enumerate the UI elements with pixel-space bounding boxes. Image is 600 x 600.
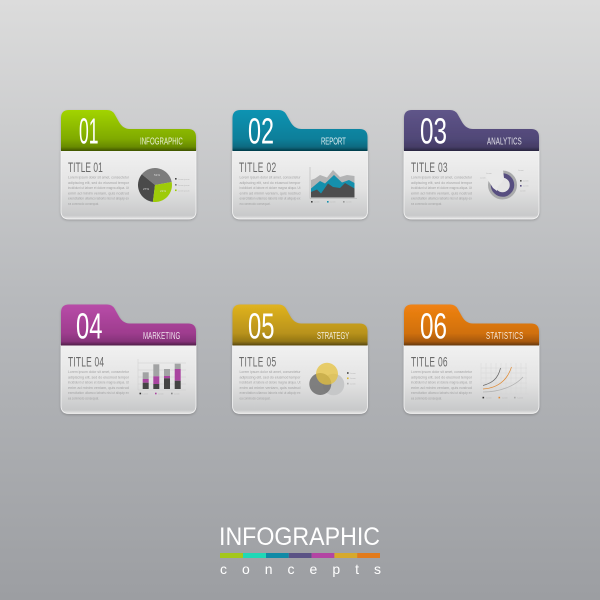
body text: enim ad minim veniam, quis nostrud [411, 190, 472, 195]
number 03: 03 [420, 110, 447, 152]
tab label: INFOGRAPHIC [140, 136, 183, 147]
body text: ea commodo consequat. [411, 201, 442, 206]
area chart: Lorem [330, 202, 336, 204]
pie chart: 21% [160, 189, 166, 193]
body text: ea commodo consequat. [411, 396, 442, 400]
card 01: infographic: 01 [79, 110, 98, 152]
body text: ea commodo consequat. [240, 396, 270, 400]
line chart: Lorem [486, 397, 492, 399]
title: TITLE 03 [411, 161, 448, 176]
line chart [481, 363, 529, 399]
body text: incididunt ut labore et dolore magna aliqua. Ut [240, 185, 301, 190]
pie chart: 27% [143, 187, 149, 191]
body text: exercitation ullamco laboris nisi ut aliquip ex [240, 196, 300, 201]
body text: incididunt ut labore et dolore magna aliqua. Ut [68, 380, 130, 385]
donut chart: Lorem [523, 181, 529, 183]
body text: Lorem ipsum dolor sit amet, consectetur [411, 174, 473, 180]
body text: Lorem ipsum dolor sit amet, consectetur [240, 369, 301, 374]
donut chart: Lorem [486, 173, 492, 175]
tab label: REPORT [321, 136, 346, 147]
body text: exercitation ullamco laboris nisi ut aliquip ex [68, 390, 129, 395]
title: TITLE 01 [68, 161, 103, 176]
body text: Lorem ipsum dolor sit amet, consectetur [411, 369, 473, 374]
tab label: ANALYTICS [487, 136, 522, 147]
area chart: Lorem [314, 202, 320, 204]
number 02: 02 [248, 110, 274, 152]
body text: exercitation ullamco laboris nisi ut aliquip ex [411, 196, 472, 201]
stacked bar chart: Lorem [142, 393, 149, 395]
title: TITLE 04 [68, 356, 104, 370]
body text: exercitation ullamco laboris nisi ut aliquip ex [411, 390, 472, 395]
body text [240, 174, 301, 206]
card 06: statistics [404, 304, 539, 414]
body text [411, 174, 473, 206]
pie chart: Lorem ipsum [178, 179, 190, 181]
stacked bar chart [138, 359, 186, 395]
card 05: strategy [232, 304, 368, 414]
venn diagram: Lorem [350, 373, 356, 375]
body text: incididunt ut labore et dolore magna aliqua. Ut [411, 185, 473, 190]
card 04: marketing [61, 304, 196, 414]
number 04: 04 [76, 306, 102, 346]
body text: incididunt ut labore et dolore magna aliqua. Ut [411, 380, 473, 385]
area chart: Lorem [346, 202, 352, 204]
body text: enim ad minim veniam, quis nostrud [240, 385, 300, 390]
donut chart: Lorem [480, 178, 486, 180]
body text: ea commodo consequat. [68, 201, 99, 206]
body text: enim ad minim veniam, quis nostrud [411, 385, 472, 390]
body text: incididunt ut labore et dolore magna aliqua. Ut [240, 380, 301, 385]
body text: exercitation ullamco laboris nisi ut aliquip ex [240, 390, 300, 395]
donut chart: Lorem [520, 191, 526, 193]
pie chart: 51% [154, 173, 160, 177]
body text: enim ad minim veniam, quis nostrud [68, 190, 129, 195]
body text: enim ad minim veniam, quis nostrud [240, 190, 300, 195]
donut chart: Lorem [523, 186, 529, 188]
body text [411, 369, 473, 400]
card 02: report [232, 110, 368, 219]
card 03: analytics [404, 110, 539, 219]
number 06: 06 [420, 306, 447, 346]
body text: ea commodo consequat. [240, 201, 270, 206]
body text: adipiscing elit, sed do eiusmod tempor [68, 180, 130, 185]
tab label: STATISTICS [486, 331, 524, 341]
body text: Lorem ipsum dolor sit amet, consectetur [68, 174, 130, 180]
tab label: MARKETING [143, 331, 180, 341]
body text: Lorem ipsum dolor sit amet, consectetur [240, 174, 301, 180]
body text: exercitation ullamco laboris nisi ut aliquip ex [68, 196, 129, 201]
colour strip [220, 553, 380, 558]
body text [68, 174, 130, 206]
body text: adipiscing elit, sed do eiusmod tempor [411, 374, 473, 379]
title: TITLE 05 [239, 356, 276, 370]
venn diagram: Lorem [350, 383, 356, 385]
body text: adipiscing elit, sed do eiusmod tempor [240, 374, 301, 379]
venn diagram: Lorem [350, 378, 356, 380]
tab label: STRATEGY [317, 331, 350, 341]
body text [240, 369, 301, 400]
card 01: infographic [61, 110, 196, 219]
footer heading: INFOGRAPHIC [219, 523, 380, 551]
body text: enim ad minim veniam, quis nostrud [68, 385, 129, 390]
stacked bar chart: Lorem [174, 393, 180, 395]
footer subtitle: concepts [220, 561, 381, 577]
stacked bar chart: Lorem [158, 393, 164, 395]
venn diagram [309, 363, 356, 395]
body text: incididunt ut labore et dolore magna aliqua. Ut [68, 185, 130, 190]
title: TITLE 06 [411, 356, 448, 370]
pie chart [138, 168, 190, 202]
body text: adipiscing elit, sed do eiusmod tempor [68, 374, 130, 379]
body text [68, 369, 130, 400]
pie chart: Lorem ipsum [178, 185, 190, 187]
body text: adipiscing elit, sed do eiusmod tempor [411, 180, 473, 185]
body text: Lorem ipsum dolor sit amet, consectetur [68, 369, 130, 374]
line chart: Lorem [502, 397, 508, 399]
body text: adipiscing elit, sed do eiusmod tempor [240, 180, 301, 185]
body text: ea commodo consequat. [68, 396, 99, 400]
number 05: 05 [248, 306, 274, 346]
pie chart: Lorem ipsum [178, 190, 190, 192]
title: TITLE 02 [239, 161, 276, 176]
line chart: Lorem [518, 397, 524, 399]
donut chart [480, 169, 529, 198]
area chart [310, 167, 357, 204]
donut chart: Lorem [518, 170, 524, 172]
